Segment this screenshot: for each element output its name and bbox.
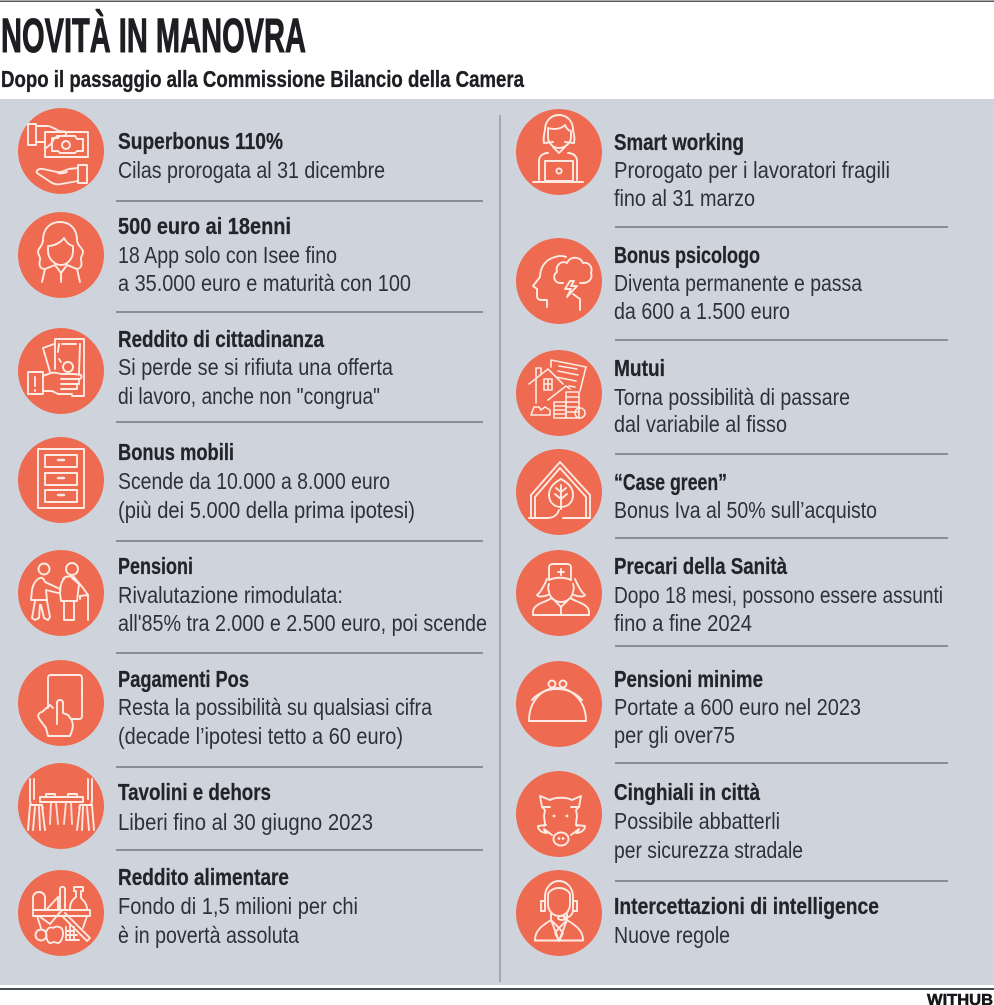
text block: Torna possibilità di passare	[614, 384, 850, 410]
text block	[614, 808, 803, 863]
text block: Prorogato per i lavoratori fragili	[614, 157, 890, 183]
icon: young woman	[18, 212, 104, 298]
text block: dal variabile al fisso	[614, 411, 787, 437]
text block: Cilas prorogata al 31 dicembre	[118, 157, 385, 183]
heading: Superbonus 110%	[118, 128, 283, 154]
panel item: Superbonus 110%	[18, 108, 385, 194]
text block: da 600 a 1.500 euro	[614, 298, 790, 324]
text block: per sicurezza stradale	[614, 837, 803, 863]
panel item: 500 euro ai 18enni	[18, 212, 411, 298]
icon: coin purse	[516, 661, 602, 747]
heading: Bonus mobili	[118, 439, 234, 465]
text block	[118, 354, 393, 409]
text block	[118, 893, 358, 948]
text block: (più dei 5.000 della prima ipotesi)	[118, 497, 415, 523]
text block: Diventa permanente e passa	[614, 270, 862, 296]
text block: (decade l’ipotesi tetto a 60 euro)	[118, 723, 403, 749]
text block: Nuove regole	[614, 922, 730, 948]
panel item: Smart working	[516, 109, 890, 211]
icon: filing cabinet	[18, 437, 104, 523]
icon: table and chairs	[18, 763, 104, 849]
text block: all'85% tra 2.000 e 2.500 euro, poi scende	[118, 610, 487, 636]
text block: 18 App solo con Isee fino	[118, 242, 337, 268]
heading: Smart working	[614, 129, 744, 155]
heading: Pensioni minime	[614, 666, 763, 692]
icon: hands exchanging money	[18, 108, 104, 194]
heading: Intercettazioni di intelligence	[614, 893, 879, 919]
icon: fist with banknotes and warning	[18, 328, 104, 414]
heading: Bonus psicologo	[614, 242, 760, 268]
panel item: Pagamenti Pos	[18, 660, 432, 749]
panel item: Mutui	[516, 350, 850, 437]
text block: Si perde se si rifiuta una offerta	[118, 354, 393, 380]
icon: nurse	[516, 550, 602, 636]
heading: Tavolini e dehors	[118, 779, 271, 805]
text block	[614, 157, 890, 211]
text block	[118, 582, 487, 636]
text block: Fondo di 1,5 milioni per chi	[118, 893, 358, 919]
text block	[118, 242, 411, 296]
text block: Possibile abbatterli	[614, 808, 780, 834]
text block: fino al 31 marzo	[614, 185, 755, 211]
subtitle: Dopo il passaggio alla Commissione Bilancio della Camera	[1, 66, 525, 92]
icon: house with leaf	[516, 449, 602, 535]
icon: operator with headset	[516, 870, 602, 956]
heading: Cinghiali in città	[614, 779, 760, 805]
text block: Scende da 10.000 a 8.000 euro	[118, 468, 390, 494]
heading: Reddito alimentare	[118, 864, 289, 890]
panel item: Precari della Sanità	[516, 550, 943, 636]
heading: Mutui	[614, 355, 665, 381]
panel item: Pensioni	[18, 550, 487, 636]
panel item: Cinghiali in città	[516, 771, 803, 863]
text block	[118, 694, 432, 749]
text block: fino a fine 2024	[614, 610, 752, 636]
text block	[614, 582, 943, 636]
text block: a 35.000 euro e maturità con 100	[118, 270, 411, 296]
panel item: Reddito alimentare	[18, 864, 358, 956]
heading: Reddito di cittadinanza	[118, 326, 324, 352]
panel item: Bonus mobili	[18, 437, 415, 523]
text block: Portate a 600 euro nel 2023	[614, 694, 861, 720]
icon: house, document and coins	[516, 350, 602, 436]
icon: hand holding card	[18, 660, 104, 746]
title: NOVITÀ IN MANOVRA	[1, 9, 306, 63]
panel item: Intercettazioni di intelligence	[516, 870, 879, 956]
icon: woman at laptop	[516, 109, 602, 195]
text block: Rivalutazione rimodulata:	[118, 582, 343, 608]
panel item: Tavolini e dehors	[18, 763, 373, 849]
panel item: Bonus psicologo	[516, 238, 862, 324]
text block	[614, 384, 850, 437]
text block	[118, 468, 415, 523]
panel item: Reddito di cittadinanza	[18, 326, 393, 414]
panel item: Pensioni minime	[516, 661, 861, 748]
icon: head with storm cloud	[516, 238, 602, 324]
heading: Pagamenti Pos	[118, 666, 249, 692]
text block: è in povertà assoluta	[118, 922, 299, 948]
heading: “Case green”	[614, 469, 727, 495]
text block: per gli over75	[614, 722, 735, 748]
icon: elderly couple with cane	[18, 550, 104, 636]
heading: 500 euro ai 18enni	[118, 213, 291, 239]
text block: Bonus Iva al 50% sull’acquisto	[614, 497, 877, 523]
text block: di lavoro, anche non "congrua"	[118, 383, 380, 409]
heading: Pensioni	[118, 553, 193, 579]
text block	[614, 694, 861, 748]
text block	[614, 270, 862, 324]
icon: boar head	[516, 771, 602, 857]
text block: Resta la possibilità su qualsiasi cifra	[118, 694, 432, 720]
panel item: Case green	[516, 449, 877, 535]
heading: Precari della Sanità	[614, 553, 787, 579]
text block: Liberi fino al 30 giugno 2023	[118, 809, 373, 835]
icon: food basket	[18, 870, 104, 956]
